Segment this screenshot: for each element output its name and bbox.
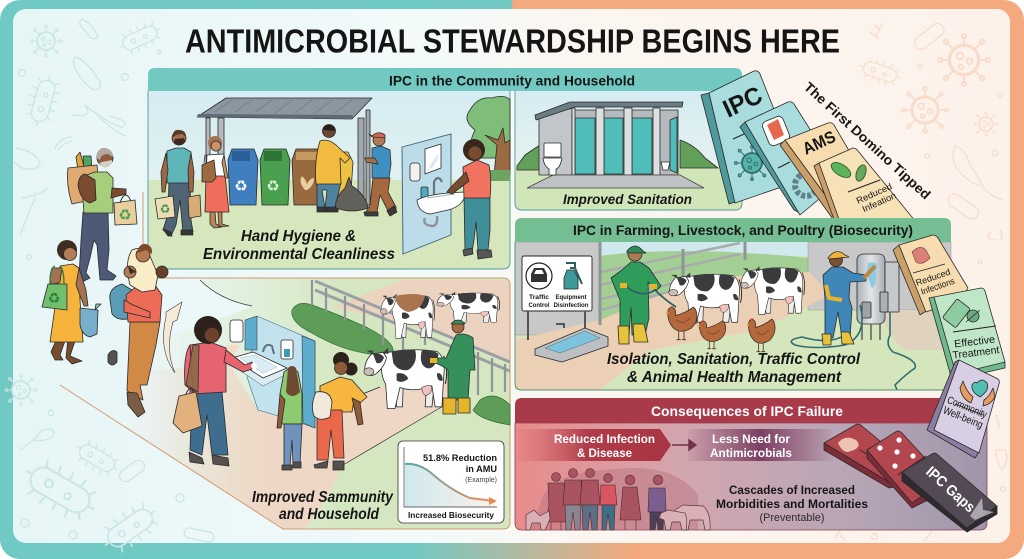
farming header: IPC in Farming, Livestock, and Poultry (Biosecurity) [573,222,913,238]
hand hygiene scene [148,91,510,269]
domino: AMS [780,123,872,222]
water trough [535,324,608,362]
farming header [515,218,951,242]
domino chain: IPC to reduced infection [701,71,916,222]
sign: traffic control and equipment disinfection [522,256,592,340]
domino: reduced infections: Infections [920,276,956,297]
domino: reduced infection: Infeation [861,190,898,214]
sanitation scene [515,91,742,210]
girl in green [277,366,302,470]
woman with tan bag [173,316,257,466]
figure: woman in yellow dress: ♻ [48,291,60,307]
recycling bins [228,149,353,205]
figure: older man with backpack and tote [68,148,137,281]
fence [601,243,740,310]
panel: consequences of IPC failure [515,398,987,530]
farm ground [515,242,951,390]
cascades text [716,483,868,524]
garbage bag [336,177,368,211]
domino: community well-being: Commonity [945,394,989,421]
title: ANTIMICROBIAL STEWARDSHIP BEGINS HERE [185,22,840,60]
front cow [364,348,447,409]
caption [252,489,394,523]
domino: reduced infections [893,235,968,315]
tree [467,96,510,181]
arrow between boxes [672,440,696,450]
caption: & Animal Health Management [627,369,842,386]
caption: and Household [279,506,379,523]
dark domino: IPC gaps [902,453,997,532]
consequences body [515,423,987,530]
panel: IPC in the community and household [148,68,742,269]
arrow box: reduced infection and disease: & Disease [577,446,632,460]
community header: IPC in the Community and Household [389,74,635,88]
hand washing wall [402,134,466,254]
domino: community well-being [927,360,999,458]
domino: IPC [701,71,802,204]
red domino with dots [867,431,945,508]
chart: reduction in AMU [398,441,504,523]
arrow box: reduced infection and disease [518,429,671,461]
box: less need for antimicrobials [688,429,833,461]
farmer spraying [611,246,676,344]
stone [108,351,117,365]
panel: IPC in farming, livestock, and poultry [515,218,951,390]
tipped domino label: The First Domino Tipped [801,79,933,202]
consequences header: Consequences of IPC Failure [651,403,843,419]
chart: reduction in AMU: Increased Biosecurity [408,510,494,520]
consequences header [515,398,987,423]
box: less need for antimicrobials: Less Need for [712,432,790,446]
worker with cap [364,133,397,216]
arrow box: reduced infection and disease: Reduced Infection [554,432,655,446]
shelter [197,98,372,208]
hose [791,305,915,390]
caption: Hand Hygiene & [241,228,356,245]
up arrow [163,302,182,373]
caption [607,351,861,386]
domino: reduced infections: Reduced [914,267,952,288]
milk tank [857,254,899,340]
figure: parent carrying children [110,244,168,417]
domino: AMS: AMS [800,127,839,159]
domino: effective treatment: Treatment [952,344,1000,362]
caption [203,228,395,263]
domino: gear and pathogen [740,102,842,215]
sanitation scene: Improved Sanitation [563,191,692,207]
affected people and animals [526,468,710,530]
box: less need for antimicrobials: Antimicrobials [710,446,792,460]
community header [148,68,742,91]
domino: community well-being: Well-being [941,404,985,431]
recycling bins: ♻ [266,177,280,195]
farmer in green [430,320,475,414]
domino: effective treatment [929,288,1005,380]
domino: reduced infection: Reduced [855,181,894,206]
handwashing station [223,316,315,428]
figure: woman in yellow dress [42,240,101,364]
domino: IPC: IPC [719,81,767,123]
recycling bins: ♻ [234,177,248,195]
sign: traffic control and equipment disinfection: Disinfection [554,302,589,309]
fence and hedges [292,280,510,425]
sign: traffic control and equipment disinfection: Traffic [529,294,549,301]
back cows [381,292,500,339]
caption: Environmental Cleanliness [203,246,395,263]
chart: reduction in AMU: (Example) [465,477,497,484]
dark domino: IPC gaps: IPC Gaps [922,463,978,516]
walkway [60,280,510,529]
cascades text: (Preventable) [760,512,824,524]
caption: Isolation, Sanitation, Traffic Control [607,351,861,368]
cows [669,266,805,324]
girl in yellow with white bag [312,352,367,470]
domino: effective treatment: Effective [954,334,996,350]
chart: reduction in AMU: in AMU [466,464,497,474]
sign: traffic control and equipment disinfection: Equipment [556,294,587,301]
woman washing hands [447,139,492,259]
sign: traffic control and equipment disinfection: Control [528,302,550,309]
man with tote bags [155,130,201,236]
cascades text: Cascades of Increased [729,483,855,497]
hens [665,306,775,352]
red domino with pathogen [824,424,905,488]
worker cleaning tank [822,252,875,345]
caption: Improved Sammunity [252,489,394,506]
panel outline [60,192,510,529]
man at the yellow bin [316,124,350,212]
failing dominoes: IPC gaps [824,424,997,532]
domino: reduced infection [814,148,916,222]
woman in coral skirt [202,136,229,228]
figure: older man with backpack and tote: ♻ [118,206,132,224]
man with tote bags: ♻ [160,202,170,216]
panel ground [60,278,510,529]
chart: reduction in AMU: 51.8% Reduction [423,453,497,463]
panel: improved community and household [60,192,510,529]
cascades text: Morbidities and Mortalities [716,497,868,511]
